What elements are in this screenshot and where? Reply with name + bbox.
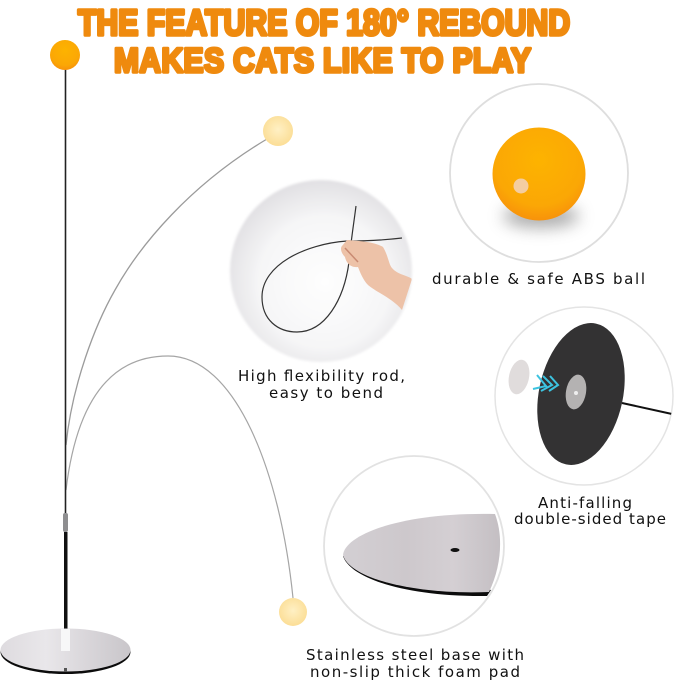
steel disc — [343, 514, 500, 592]
curved rod to upper ball — [66, 139, 267, 445]
panel: stainless steel base: non-slip thick foam pad — [310, 663, 520, 681]
panel: stainless steel base — [306, 456, 524, 681]
circle frame — [324, 456, 504, 636]
curved rod to lower ball — [66, 356, 293, 598]
arrows — [533, 375, 558, 391]
caption: High flexibility rod, — [238, 367, 405, 385]
disc rod — [622, 403, 672, 414]
caption: Stainless steel base with — [306, 646, 524, 664]
circle frame — [495, 307, 673, 485]
product: rebound stand with three rod positions — [0, 40, 307, 674]
ball shadow — [503, 204, 579, 228]
panel: ABS ball — [432, 84, 645, 288]
panel: double-sided tape — [495, 307, 673, 528]
ball seal — [514, 178, 528, 194]
pale ball, upper — [263, 116, 293, 146]
panel: flexible rod: easy to bend — [269, 384, 383, 402]
circle frame — [450, 84, 628, 262]
panel: double-sided tape: double-sided tape — [514, 510, 666, 528]
stem — [64, 532, 68, 630]
title: MAKES CATS LIKE TO PLAY — [114, 41, 531, 79]
pale ball, lower — [279, 598, 307, 626]
caption: durable & safe ABS ball — [432, 270, 645, 288]
caption: Anti-falling — [538, 494, 632, 512]
orange ball — [492, 128, 586, 220]
joiner — [63, 513, 68, 532]
circle frame — [230, 180, 412, 362]
mirror base — [0, 628, 130, 674]
title: THE FEATURE OF 180° REBOUND — [78, 3, 570, 44]
foam pad edge — [343, 556, 491, 596]
bent wire and hand — [262, 206, 412, 332]
tape patch on disc — [566, 374, 586, 410]
title — [78, 3, 570, 79]
loose tape sticker — [508, 360, 530, 394]
upright rod — [64, 68, 66, 520]
black disc — [537, 323, 625, 465]
upright orange ball — [50, 40, 80, 70]
panel: flexible rod — [230, 180, 412, 402]
centre hole — [450, 548, 460, 552]
